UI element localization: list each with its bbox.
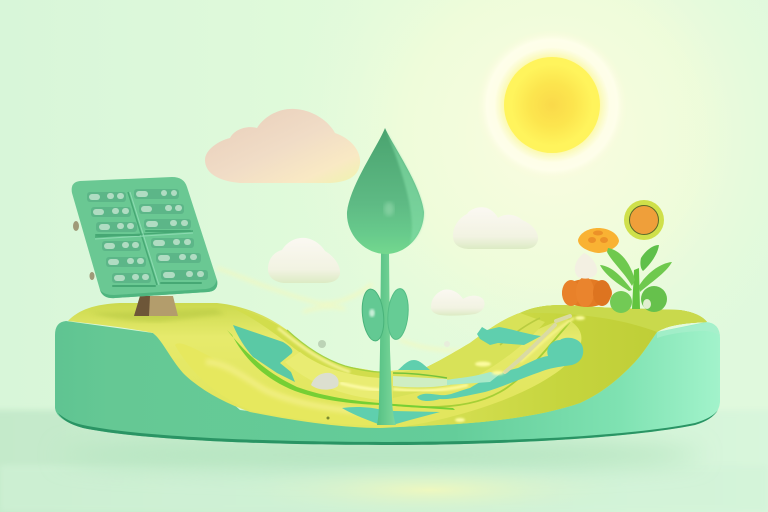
plant green bulbs	[610, 291, 632, 313]
shadow at left hill foot	[90, 309, 225, 322]
white gourd	[575, 253, 597, 279]
solar panel	[72, 177, 217, 298]
small cloud centre-left	[268, 238, 340, 283]
teardrop tower top	[347, 128, 424, 254]
platform base	[55, 321, 720, 445]
panel dark row lines	[95, 230, 202, 287]
panel cell divider lines	[95, 192, 193, 285]
plant	[600, 245, 672, 313]
solar panel mounts	[73, 221, 94, 280]
wind turbine pole	[377, 252, 396, 425]
centre bands	[285, 352, 380, 400]
pebbles	[311, 340, 450, 420]
right cloud	[453, 207, 538, 249]
pumpkin	[562, 277, 612, 307]
green ribbon and teal leaf	[227, 325, 455, 410]
platform top rim highlight	[657, 323, 720, 338]
solar panel stand	[134, 296, 178, 316]
orange sun disc icon	[624, 200, 664, 240]
panel row pads	[87, 189, 208, 283]
small cloud near windmill	[431, 289, 485, 316]
pale creek glass	[447, 372, 500, 385]
lower valley swell	[175, 343, 378, 425]
back edge line	[287, 330, 380, 372]
right hill	[400, 305, 707, 427]
platform bottom edge	[58, 410, 718, 445]
right band strip pale	[393, 376, 450, 387]
turbine blades	[360, 288, 410, 342]
teal creek patches	[398, 327, 583, 401]
large cloud	[205, 109, 360, 183]
teal pool at base of pole	[342, 407, 440, 424]
right upper bands	[393, 313, 545, 398]
orange flower	[578, 228, 619, 253]
sun	[476, 29, 628, 181]
creek connector	[505, 316, 570, 372]
energy wisps	[217, 268, 480, 351]
right hill top light	[520, 305, 707, 332]
glow sparkles	[455, 316, 585, 422]
panel cells dots	[89, 190, 204, 281]
back edge highlight	[278, 328, 350, 372]
yellow-green terrain	[68, 303, 707, 428]
back edge band	[230, 307, 380, 382]
